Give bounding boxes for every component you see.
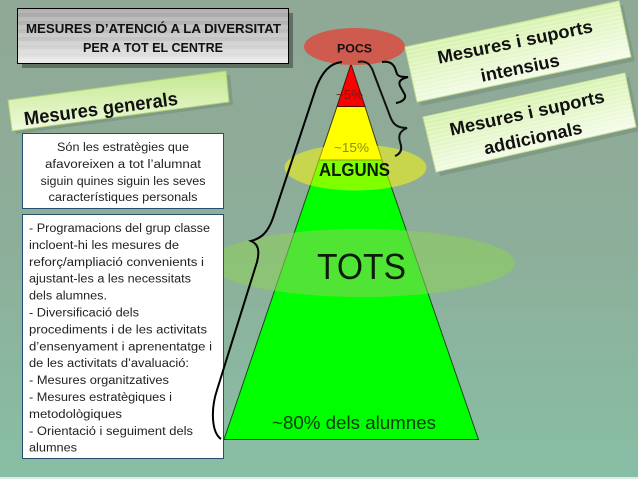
text box: list of measures: ajustant-les a les necessitats: [29, 274, 191, 286]
text box: list of measures: - Programacions del grup classe: [29, 223, 210, 235]
text box: list of measures: de les activitats d’avaluació:: [29, 358, 189, 370]
brace: some students: [358, 62, 407, 156]
title box: MESURES D’ATENCIÓ A LA DIVERSITAT: [26, 21, 281, 36]
text box: list of measures: metodològiques: [29, 409, 122, 421]
title box: PER A TOT EL CENTRE: [83, 40, 223, 55]
label: POCS: POCS: [337, 42, 372, 56]
label: ~15%: ~15%: [334, 140, 369, 155]
text box: list of measures: - Orientació i seguiment dels: [29, 426, 193, 438]
text box: list of measures: incloent-hi les mesures de: [29, 240, 179, 252]
text box: general description: [22, 134, 224, 208]
text box: list of measures: [22, 214, 224, 458]
text box: list of measures: procediments i de les activitats: [29, 324, 207, 336]
ellipse: POCS highlight: [304, 28, 405, 65]
text box: list of measures: - Mesures estratègiques i: [29, 392, 172, 404]
banner: Mesures generals: [8, 71, 233, 134]
text box: list of measures: - Mesures organitzatives: [29, 375, 169, 387]
pyramid tier: green base: [224, 160, 478, 440]
banner: Mesures i suports addicionals: Mesures i suports: [448, 86, 606, 140]
title box: [18, 8, 293, 68]
pyramid tier: yellow middle: [319, 106, 382, 160]
label: ALGUNS: ALGUNS: [319, 160, 390, 180]
brace: few students: [382, 62, 408, 103]
text box: list of measures: reforç/ampliació convenients i: [29, 257, 204, 269]
pyramid tier: red top: [337, 64, 365, 106]
text box: general description: característiques personals: [48, 192, 198, 204]
text box: list of measures: alumnes: [29, 443, 77, 455]
brace: all students: [213, 62, 342, 439]
text box: list of measures: - Diversificació dels: [29, 308, 139, 320]
text box: list of measures: dels alumnes.: [29, 291, 107, 303]
banner: Mesures i suports addicionals: [423, 73, 638, 176]
banner: Mesures generals: Mesures generals: [23, 89, 179, 130]
ellipse: ALGUNS highlight: [284, 144, 426, 190]
text box: list of measures: d’ensenyament i aprenentatge i: [29, 341, 212, 353]
label: TOTS: TOTS: [317, 246, 406, 287]
text box: general description: afavoreixen a tot l’alumnat: [45, 159, 202, 171]
banner: Mesures i suports intensius: [405, 1, 635, 106]
text box: general description: siguin quines siguin les seves: [40, 176, 206, 188]
banner: Mesures i suports addicionals: addicionals: [482, 118, 584, 158]
ellipse: TOTS highlight: [209, 229, 515, 297]
banner: Mesures i suports intensius: Mesures i suports: [436, 16, 594, 68]
text box: general description: Són les estratègies que: [57, 142, 189, 154]
pyramid: [224, 64, 478, 440]
banner: Mesures i suports intensius: intensius: [479, 50, 561, 86]
label: ~5%: ~5%: [336, 87, 363, 102]
label: 80% of students: ~80% dels alumnes: [272, 413, 436, 433]
